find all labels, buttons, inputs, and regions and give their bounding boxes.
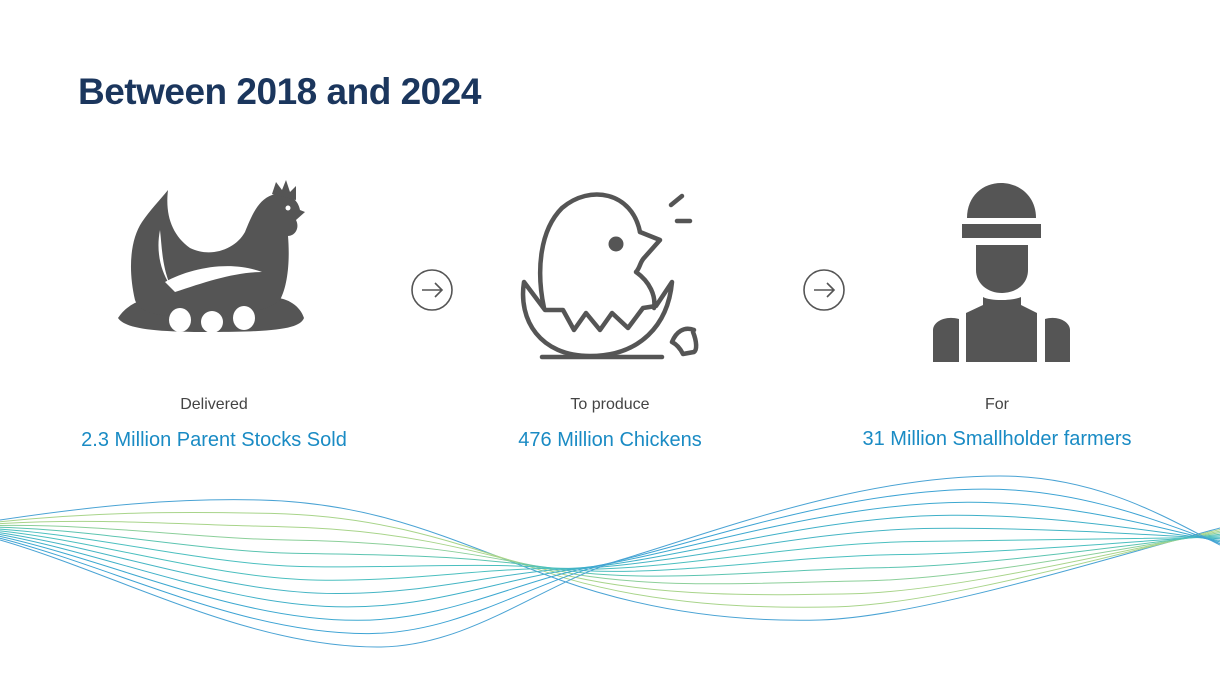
text block: produce [518, 396, 702, 451]
text block: delivered: 2.3 Million Parent Stocks Sold [81, 429, 347, 451]
text block: produce: To produce [570, 396, 650, 413]
text block: farmers: 31 Million Smallholder farmers [862, 428, 1131, 450]
text block: produce: 476 Million Chickens [518, 429, 702, 451]
text block: delivered [81, 396, 347, 451]
icon: farmer [933, 183, 1070, 362]
text block: delivered: Delivered [180, 396, 248, 413]
icon: hen on nest [118, 180, 305, 332]
arrow 1 [411, 269, 453, 311]
title: Between 2018 and 2024 [78, 71, 481, 112]
icon: hatching chick [520, 192, 698, 360]
text block: farmers: For [985, 396, 1009, 413]
text block: farmers [862, 396, 1131, 450]
arrow 2 [803, 269, 845, 311]
